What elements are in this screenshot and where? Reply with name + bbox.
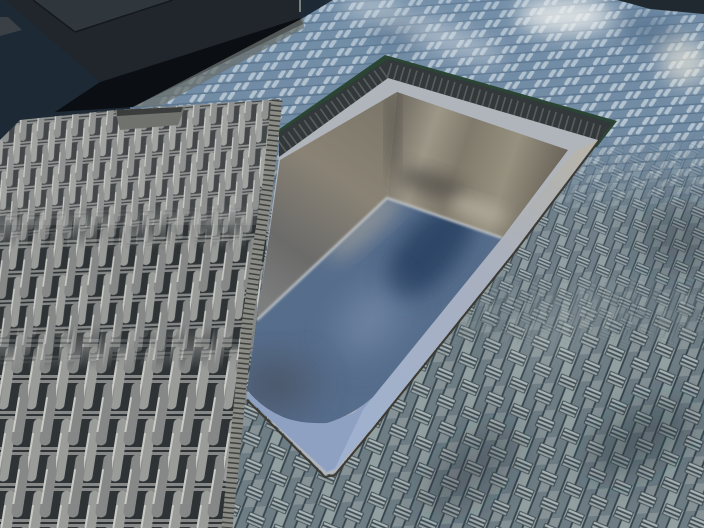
tray outer edge	[247, 142, 598, 477]
reflected cushion band on glass	[133, 18, 304, 107]
cushion top	[33, 0, 173, 32]
front lip	[247, 392, 373, 472]
frame strand ticks	[281, 70, 604, 146]
cushion piping	[33, 0, 173, 32]
lid edge strands	[227, 100, 277, 528]
woven lid	[0, 99, 282, 528]
floor ridge highlight	[257, 198, 502, 320]
sky and cloud reflection on the glass	[340, 0, 704, 84]
lid sunlit tint	[0, 99, 282, 225]
lid lower section	[0, 325, 253, 528]
cushion edge highlight	[299, 0, 301, 12]
basin floor	[247, 198, 502, 424]
shadow under cushion	[55, 18, 303, 112]
left wall	[257, 92, 397, 320]
light patch on the floor	[0, 17, 22, 36]
lid middle section	[0, 205, 271, 370]
back wall	[387, 92, 568, 238]
soft shadows on the wicker	[409, 210, 704, 527]
rim	[247, 78, 598, 475]
handle slot	[115, 107, 185, 130]
wicker frame around the tray opening	[278, 55, 617, 158]
right rim band	[325, 140, 598, 472]
steel tray	[235, 78, 598, 477]
handle shadow	[117, 107, 183, 116]
frame green glass edge	[278, 55, 617, 147]
lid upper section	[0, 99, 282, 250]
basin walls	[257, 85, 568, 320]
top right dark reflection	[617, 0, 704, 14]
lid right edge wrap	[227, 100, 277, 528]
wall reflections	[388, 85, 509, 228]
seat cushion	[5, 0, 303, 112]
cushion side	[5, 0, 300, 82]
frame woven band	[279, 59, 612, 158]
